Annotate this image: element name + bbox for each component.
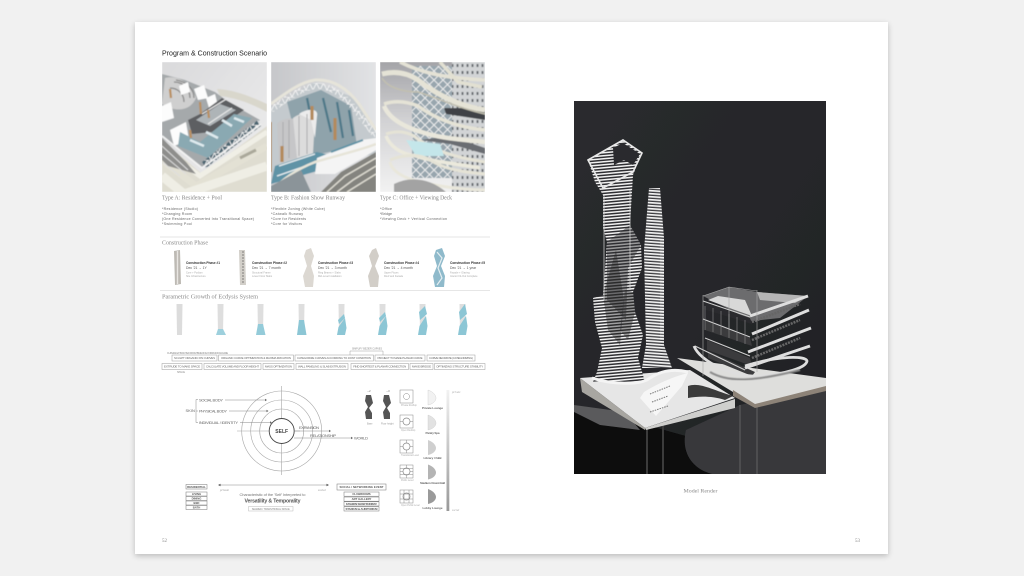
tag row 2: EXTRUDE TO MAKE SPACE: [164, 364, 200, 368]
plan 1: [400, 390, 413, 403]
growth stage 5: [337, 304, 346, 335]
caption: Type B: [271, 194, 346, 226]
wedge: private lounge: Private Lounge: [422, 406, 443, 410]
concentric rings: [237, 386, 322, 475]
main twisted tower: [588, 140, 645, 382]
phase 5: Interior Fit-Out Complete: [450, 275, 478, 278]
residential program list: RESIDENTIAL: [187, 485, 206, 489]
tag row 1: CATEGORIZE CURVES ACCORDING TO JOINT CONDITION: [297, 356, 371, 360]
table legs: [647, 405, 757, 474]
program gradient wedges: [420, 390, 445, 510]
phase 1: [174, 250, 221, 285]
plan 2: [400, 415, 413, 428]
phase 1: Core + Podium: [186, 272, 203, 274]
scaffold lines: [703, 287, 757, 376]
phase 5: Dec '21 → 1 year: [450, 266, 477, 270]
right table: [677, 358, 826, 408]
social program list: SOCIAL / NETWORKING EVENT: [340, 485, 384, 489]
growth stage 8: [458, 304, 468, 335]
wedge: lobby lounge: Lobby Lounge: [422, 506, 443, 510]
self core: [269, 418, 294, 444]
growth stage 2: [216, 304, 226, 335]
caption: Type A: (One Residence Converted Into Transitional Space): [162, 217, 254, 221]
left table: [580, 370, 735, 430]
caption: Type C: Type C: Office + Viewing Deck: [380, 194, 453, 202]
small tower sections: ~3: [386, 389, 390, 393]
ribbons: [694, 296, 811, 376]
tag row 2: FIND SHORTEST & PLANAR CONNECTION: [353, 364, 406, 368]
phase 4: Dec '21 → 4 month: [384, 266, 413, 270]
residential program list: BED: [194, 501, 199, 505]
phase 4: Construction Phase #4: [384, 260, 420, 265]
tower podium: [592, 370, 688, 383]
floor plan icons: [400, 390, 413, 503]
spectrum arrow with caption: Versatility & Temporality: [244, 498, 301, 504]
social program list: STADIUM & AUDITORIUM: [346, 507, 378, 511]
skin bracket labels: [186, 398, 272, 425]
spectrum arrow with caption: private: [219, 488, 230, 492]
social program list: CLUBROOMS: [352, 492, 371, 496]
phase 4: Upper Floors: [384, 272, 399, 274]
floor shadows: [574, 385, 826, 474]
caption: Type B: *Core for Residents: [271, 217, 306, 221]
phase 2: Dec '21 → 7 month: [252, 266, 281, 270]
small tower sections: [365, 389, 394, 426]
plan 3: [400, 440, 413, 453]
residential program list: LIVING: [192, 492, 201, 496]
phase 3: [303, 248, 354, 287]
caption: Type A: *Changing Room: [162, 212, 192, 216]
expansion and world arrows: [294, 425, 368, 440]
skin bracket labels: SKIN: [186, 408, 195, 413]
phase 3: Construction Phase #3: [318, 260, 354, 265]
phase 3: Dec '21 → 3 month: [318, 266, 347, 270]
residential program list: BATH: [193, 506, 200, 510]
construction phase row: [174, 248, 486, 287]
page shadow: [135, 24, 888, 556]
tag row 1: CURVE DECIMATE (CATEGORIZING): [429, 356, 473, 360]
floor plan captions: Private Rooftop: [401, 404, 418, 407]
note: space: SPACE: [177, 371, 185, 374]
note: simplify bezier curves: SIMPLIFY BEZIER CURVES: [352, 348, 382, 350]
spectrum arrow with caption: [218, 484, 329, 511]
parametric growth tower row: [176, 304, 468, 335]
note: simplify bezier curves: [350, 348, 383, 355]
skin bracket labels: INDIVIDUAL / IDENTITY: [199, 420, 238, 425]
expansion and world arrows: EXPANSION: [299, 425, 319, 430]
growth stage 4: [297, 304, 306, 335]
caption: Type B: Type B: Fashion Show Runway: [271, 194, 346, 202]
caption: Type C: *Office: [380, 207, 392, 211]
residential program list: DINING: [192, 496, 201, 500]
stepped building model: [694, 287, 811, 379]
growth stage 1: [176, 304, 182, 335]
small tower sections: Floor height: [381, 422, 394, 426]
spectrum arrow with caption: Characteristic of the 'Self' Interpreted to: [240, 492, 306, 497]
tag row 2: CALCULATE VOLUME AND FLOOR HEIGHT: [206, 364, 259, 368]
slim tower: [642, 188, 672, 368]
phase 4: Roof and Facade: [384, 275, 404, 278]
phase 5: [433, 248, 486, 287]
self concentric diagram: [186, 386, 368, 475]
growth stage 6: [378, 304, 388, 335]
skin bracket labels: PHYSICAL BODY: [199, 408, 227, 414]
tag row 2: WALL PANELING & SLAB EXTRUSION: [298, 364, 346, 368]
page number right: 53: [855, 539, 860, 544]
wedge: pantry spa: Pantry Spa: [426, 431, 440, 435]
heading: Parametric Growth of Ecdysis System: Parametric Growth of Ecdysis System: [162, 294, 258, 300]
caption: Type A: [162, 194, 254, 226]
private to social gradient bar: private: [451, 390, 461, 394]
note: extracted curves: CURVES EXTRACTED FROM BUILDING FORM AND FACADE: [167, 352, 228, 355]
social program list: [337, 484, 386, 511]
social program list: FASHION SHOW RUNWAY: [346, 502, 377, 506]
phase 1: Site Infrastructure: [186, 275, 206, 278]
phase 3: Ring Beams + Slabs: [318, 272, 341, 274]
private to social gradient bar: [446, 390, 461, 512]
floor plan captions: Open Rooftop: [401, 429, 416, 432]
phase 5: Construction Phase #5: [450, 260, 486, 265]
skin bracket labels: SOCIAL BODY: [199, 398, 223, 402]
phase 5: Facade + Glazing: [450, 272, 470, 274]
phase 2: Construction Phase #2: [252, 260, 288, 265]
caption: Type B: *Flexible Zoning (White Cube): [271, 207, 325, 211]
expansion and world arrows: WORLD: [354, 436, 368, 440]
phase 3: Mid-Level Installation: [318, 275, 342, 278]
tag row 2: OPTIMIZING STRUCTURE STABILITY: [436, 364, 483, 368]
wedge: library: Library / F&B: [424, 456, 442, 460]
phase 1: Dec '21 → 1Y: [186, 266, 208, 270]
tag row 1: ORGANIC CURVE OPTIMIZATION & MAXIMA FRICATION: [221, 356, 291, 360]
model render photo: [574, 101, 826, 474]
social program list: ART GALLERY: [352, 497, 372, 501]
tag row 1: [172, 355, 475, 361]
plan 4: [400, 465, 413, 478]
plan 5: [400, 490, 413, 503]
floor plan captions: Public Level: [401, 480, 414, 482]
private to social gradient bar: social: [452, 508, 459, 512]
caption: Type B: *Catwalk Runway: [271, 212, 303, 216]
white magazine spread: [135, 22, 888, 554]
image: Type C office and viewing deck model photo: [380, 62, 485, 192]
caption: Type A: *Residence (Studio): [162, 207, 198, 211]
spectrum arrow with caption: SHARED / TRANSITIONAL SPACE: [252, 507, 290, 511]
floor plan captions: [401, 404, 420, 507]
page number left: 52: [162, 539, 168, 544]
expansion and world arrows: RELATIONSHIP: [310, 433, 336, 438]
caption: Type A: *Swimming Pool: [162, 222, 192, 226]
tag row 2: [162, 364, 485, 370]
wedge: stadium: Stadium / Event Hall: [420, 481, 445, 485]
tag row 2: MAKE BRIDGE: [412, 364, 431, 368]
phase 1: Construction Phase #1: [186, 260, 221, 265]
residential program list: [186, 484, 207, 510]
phase 2: Structural Frame: [252, 272, 271, 274]
small tower sections: Base: [367, 422, 373, 426]
tag row 1: SCULPT ORGANIC FIN CURVES: [174, 356, 215, 360]
tag row 1: PROJECT TO MAKE PLANAR CURVE: [378, 356, 423, 360]
process tags: [162, 348, 485, 374]
image: Type B fashion show runway model photo: [271, 62, 376, 192]
tag row 2: MASS OPTIMIZATION: [265, 364, 292, 368]
small tower sections: ~2: [367, 389, 371, 393]
growth stage 7: [418, 304, 428, 335]
self core: SELF: [275, 429, 288, 435]
caption: Type B: *Core for Visitors: [271, 222, 302, 226]
caption: Type C: *Bridge: [380, 212, 392, 216]
floor plan captions: Transitional Level: [401, 454, 419, 457]
floor plan captions: Open Public Level: [401, 505, 420, 507]
heading: Construction Phase: Construction Phase: [162, 240, 208, 246]
phase 4: [368, 248, 420, 287]
caption: Type C: *Viewing Deck + Vertical Connection: [380, 217, 447, 221]
title: Program & Construction Scenario: [162, 48, 267, 58]
facade floors: [695, 287, 808, 376]
model render caption: Model Render: [684, 490, 718, 494]
image: Type A residence and pool model photo: [162, 62, 267, 192]
caption: Type C: [380, 194, 453, 221]
phase 2: Lower Floor Slabs: [252, 275, 273, 278]
phase 2: [239, 250, 288, 285]
caption: Type A: Type A: Residence + Pool: [162, 194, 222, 202]
growth stage 3: [256, 304, 266, 335]
spectrum arrow with caption: social: [318, 488, 326, 492]
